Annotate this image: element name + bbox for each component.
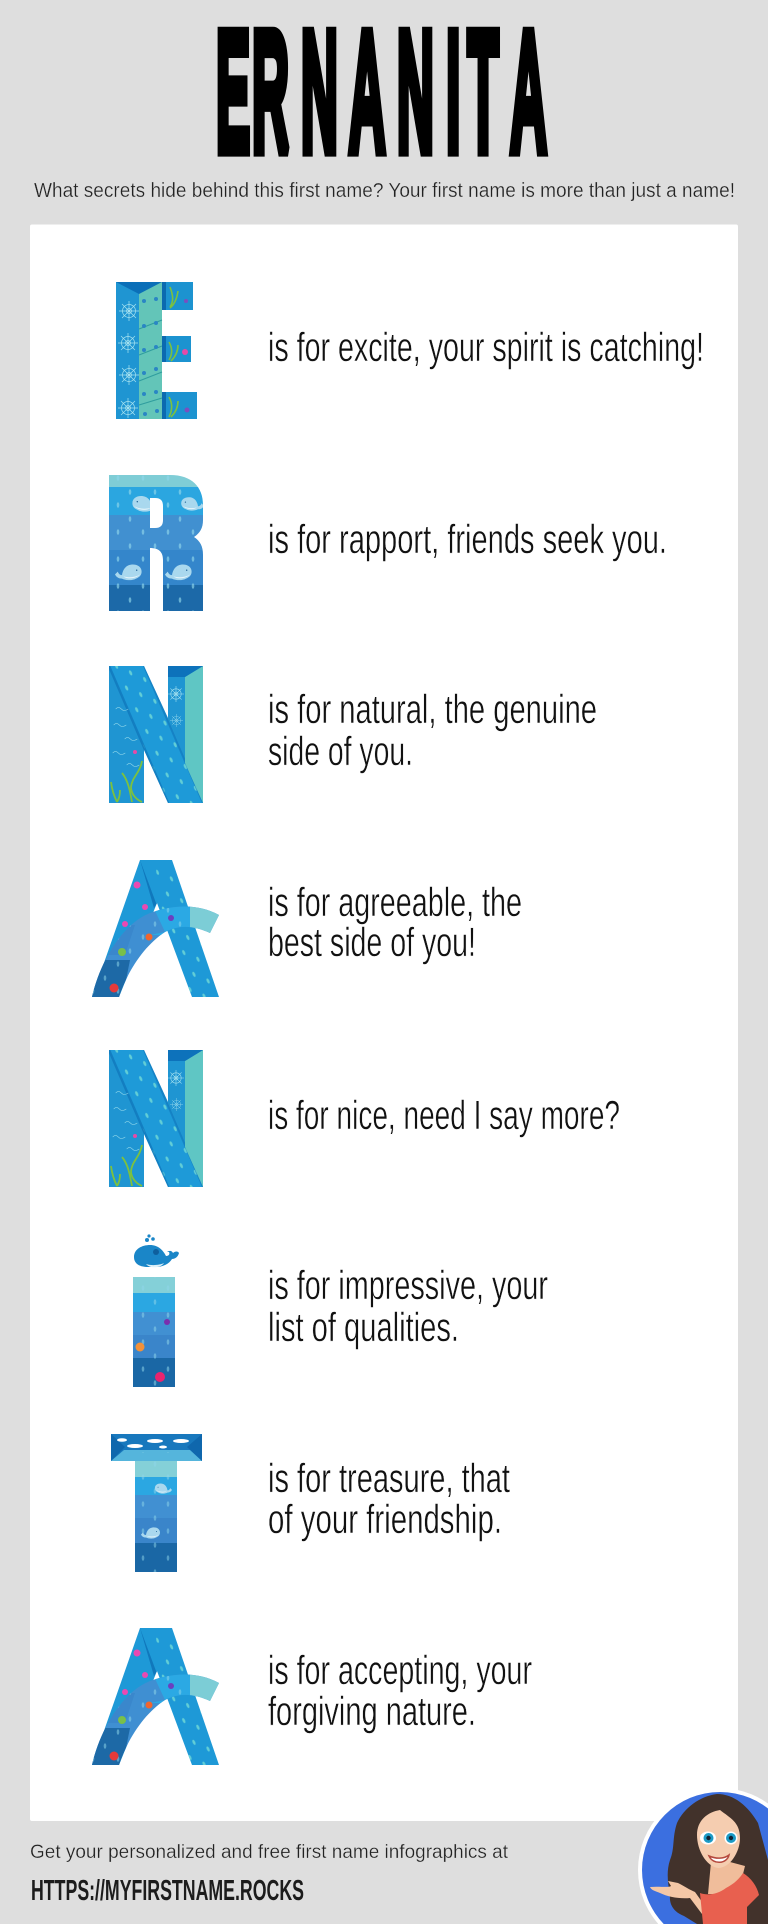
letter A (90, 860, 222, 1000)
letter A (second) (90, 1628, 222, 1768)
text: A: best side of you! (268, 919, 476, 965)
text: T: is for treasure, that (268, 1455, 510, 1501)
text: I: list of qualities. (268, 1304, 459, 1350)
text: I: is for impressive, your (268, 1262, 548, 1308)
text: T (268, 1455, 510, 1542)
text: I (268, 1262, 548, 1350)
text: N: is for natural, the genuine (268, 686, 597, 732)
icon: whale (134, 1234, 179, 1267)
panel: white content card (30, 224, 738, 1821)
subtitle: What secrets hide behind this first name? Your first name is more than just a name! (34, 179, 735, 202)
letter T (111, 1434, 202, 1572)
letter N (second) (109, 1050, 203, 1187)
text: N second: is for nice, need I say more? (268, 1092, 620, 1138)
arm (650, 1881, 705, 1914)
text: N: side of you. (268, 728, 413, 774)
footer url: HTTPS://MYFIRSTNAME.ROCKS (31, 1875, 304, 1907)
text: A (268, 879, 522, 965)
letter N (109, 666, 203, 803)
avatar: cartoon woman in circle (638, 1788, 768, 1924)
mouth (709, 1855, 729, 1862)
footer text: Get your personalized and free first name infographics at (30, 1841, 509, 1863)
text: A second: is for accepting, your (268, 1647, 532, 1693)
text: T: of your friendship. (268, 1496, 502, 1542)
eyes (700, 1832, 738, 1844)
letter E (116, 282, 197, 419)
hair (668, 1794, 768, 1924)
text: A second (268, 1647, 532, 1734)
shirt (700, 1873, 759, 1924)
text: A second: forgiving nature. (268, 1688, 476, 1734)
neck (708, 1862, 745, 1894)
title: ERNANITA (216, 0, 547, 187)
text: N (268, 686, 597, 774)
letter I with whale (133, 1234, 179, 1387)
text: A: is for agreeable, the (268, 879, 522, 925)
face (697, 1810, 740, 1868)
letter R (109, 475, 204, 611)
